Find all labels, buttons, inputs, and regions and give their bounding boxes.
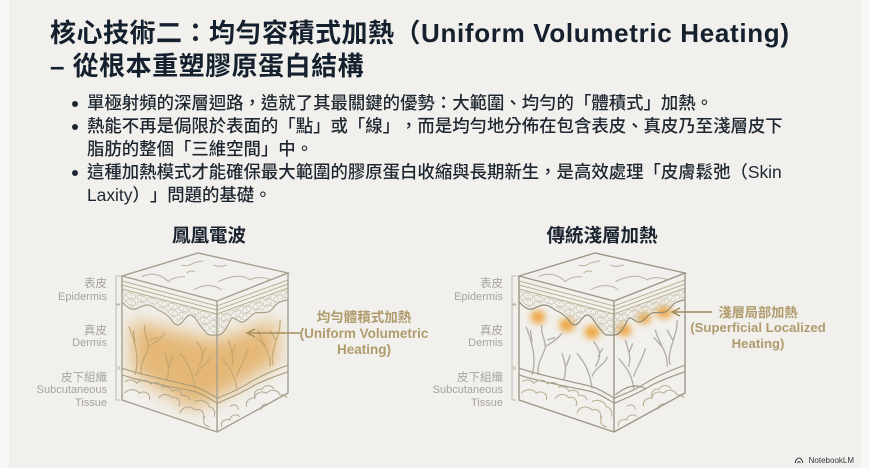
callout: superficial localized heating: Heating)	[732, 336, 784, 351]
layer labels: right cube	[433, 276, 516, 409]
skin detail in zoomed coordinates	[122, 261, 288, 427]
title	[50, 18, 790, 81]
epidermis layers and wave	[122, 280, 288, 314]
layer labels: right cube: 表皮	[480, 276, 503, 290]
bullet list: 單極射頻的深層迴路，造就了其最關鍵的優勢：大範圍、均勻的「體積式」加熱。	[87, 93, 713, 113]
epidermis cells	[519, 289, 614, 333]
callout: uniform volumetric heating: (Uniform Volumetric	[300, 326, 429, 341]
fat lobules	[124, 380, 287, 427]
vessels	[129, 320, 280, 388]
bullet list	[72, 93, 783, 205]
layer labels: left cube: 真皮	[84, 323, 107, 337]
layer labels: left cube: Tissue	[75, 397, 107, 409]
heading: right diagram: 傳統淺層加熱	[546, 225, 658, 246]
fat lobules	[521, 380, 684, 427]
layer labels: left cube: 皮下組織	[61, 371, 107, 384]
callout: uniform volumetric heating: 均勻體積式加熱	[317, 309, 412, 325]
layer labels: right cube: Tissue	[471, 397, 503, 409]
heat spots: localized	[530, 306, 672, 339]
layer labels: right cube: 真皮	[480, 323, 503, 337]
layer labels: left cube: 表皮	[84, 276, 107, 290]
subcutaneous boundary	[122, 365, 288, 403]
diagram: Phoenix RF uniform heating cube	[122, 253, 288, 432]
layer labels: right cube: Dermis	[468, 337, 503, 349]
title: – 從根本重塑膠原蛋白結構	[50, 51, 364, 81]
epidermis layers and wave	[519, 280, 685, 314]
layer labels: left cube: Subcutaneous	[37, 384, 107, 396]
callout: superficial localized heating	[672, 304, 826, 351]
heading: left diagram: 鳳凰電波	[172, 225, 246, 246]
callout: superficial localized heating: 淺層局部加熱	[718, 304, 798, 320]
diagram: conventional superficial heating cube	[519, 253, 685, 432]
cube outline edges	[122, 253, 288, 432]
callout: uniform volumetric heating: Heating)	[337, 342, 391, 357]
layer labels: left cube: Dermis	[72, 337, 107, 349]
layer labels: right cube: Subcutaneous	[433, 384, 503, 396]
skin detail in zoomed coordinates	[519, 261, 685, 427]
title: 核心技術二：均勻容積式加熱（Uniform Volumetric Heating)	[50, 18, 790, 48]
bullet list: 脂肪的整個「三維空間」中。	[87, 139, 313, 159]
callout: superficial localized heating: (Superficial Localized	[690, 320, 826, 335]
callout: uniform volumetric heating	[247, 309, 429, 357]
top face creases	[539, 261, 667, 290]
bullet list: Laxity）」問題的基礎。	[87, 185, 272, 205]
layer labels: left cube: Epidermis	[58, 291, 107, 303]
layer labels: right cube: 皮下組織	[457, 371, 503, 384]
layer labels: right cube: Epidermis	[454, 291, 503, 303]
vessels	[526, 320, 677, 388]
subcutaneous boundary	[519, 365, 685, 403]
bullet list: 熱能不再是侷限於表面的「點」或「線」，而是均勻地分佈在包含表皮、真皮乃至淺層皮下	[87, 116, 783, 136]
epidermis cells	[122, 289, 217, 333]
top face creases	[142, 261, 270, 290]
heat zone: volumetric	[132, 320, 278, 410]
cube outline edges	[519, 253, 685, 432]
NotebookLM watermark: NotebookLM	[809, 456, 854, 465]
layer labels: left cube	[37, 276, 120, 409]
bullet list: 這種加熱模式才能確保最大範圍的膠原蛋白收縮與長期新生，是高效處理「皮膚鬆弛（Skin	[87, 162, 782, 182]
